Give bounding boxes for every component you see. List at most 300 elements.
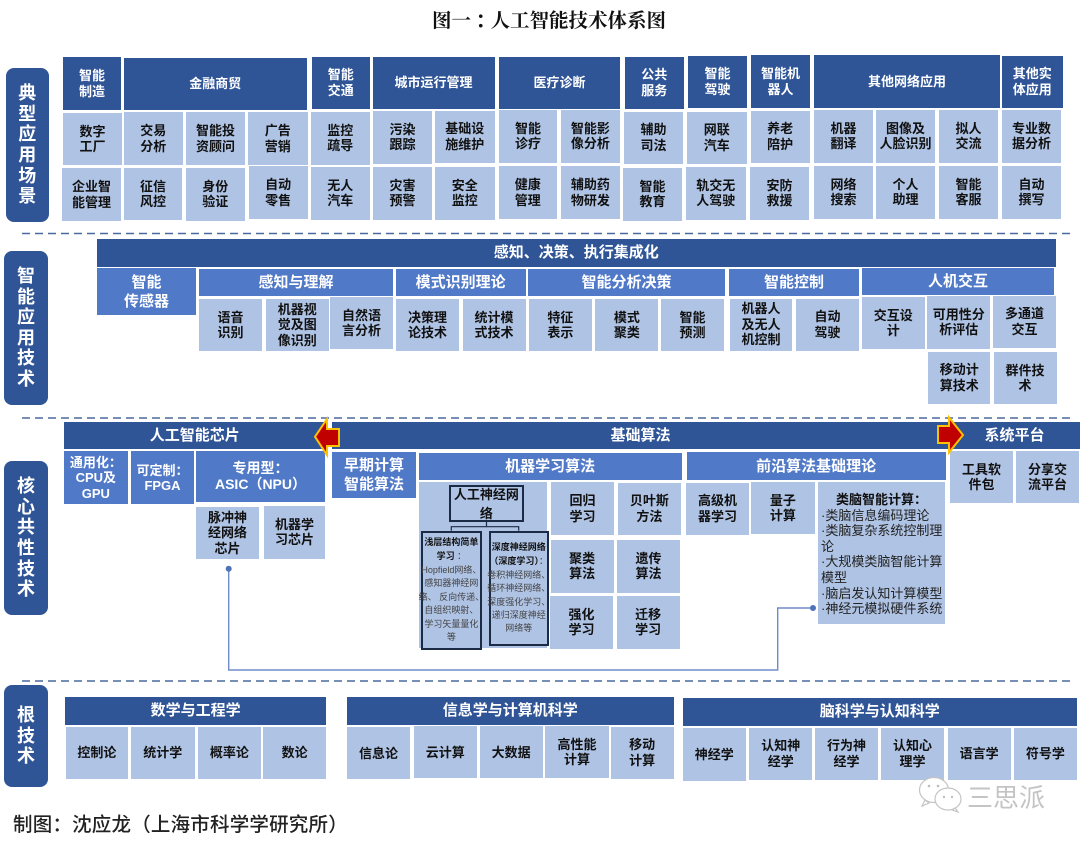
cell: statistical patterns [462,299,526,351]
cell: intelligent prediction [661,299,724,351]
cell: feature representation: 表示 [547,325,573,340]
cell: disaster warning [373,167,432,220]
cell: autonomous driving [796,299,859,351]
title: 图一 人工智能技术体系图 [432,5,666,33]
cell: cognitive psychology: 认知心 [893,738,932,753]
section label: typical application scenarios: 景 [18,186,36,206]
cell: professional data analysis [1002,110,1061,162]
cell: automated writing: 撰写 [1018,192,1044,207]
cell: advanced machine learning: 高级机 [698,493,737,508]
cell: linguistics [948,728,1011,780]
header: information and computer science [347,697,674,725]
cell: elderly care: 陪护 [767,137,793,152]
cell: multichannel interaction [993,296,1056,348]
subheader: general purpose chips: GPU [82,486,110,501]
cell: advertising [248,112,308,165]
cell: spiking neural network chips [196,507,259,559]
cell: machine learning chips: 机器学 [275,517,314,532]
box: deep learning: （深度学习）： [489,554,548,567]
header: smart transport [312,57,370,109]
section label: intelligent application technologies: 用 [17,328,35,348]
cell: probability theory: 概率论 [210,745,249,760]
cell: transfer learning [617,596,680,648]
cell: semiotics: 符号学 [1026,746,1065,761]
cell: credit risk control [124,168,182,220]
cell: judicial assistance: 辅助 [640,122,666,137]
cell: behavioral neuroscience [815,728,878,780]
cell: high performance computing: 高性能 [557,737,596,752]
cell: toolkits: 件包 [968,477,994,492]
cell: usability analysis: 析评估 [939,322,978,337]
header: system platforms [949,422,1080,449]
cell: statistical patterns: 统计模 [474,310,514,324]
box: deep learning: 循环神经网络、 [487,583,550,593]
cell: mobile computing: 移动计 [940,362,979,377]
panel: typical application scenarios [6,55,1063,222]
header: other physical applications: 体应用 [1013,82,1052,97]
cell: web search [814,166,873,218]
cell: groupware: 术 [1018,378,1032,393]
cell: brain-inspired computing [818,482,945,624]
header: other physical applications [1002,56,1062,108]
subheader: FPGA: FPGA [144,478,181,493]
cell: enterprise management: 企业智 [72,179,111,194]
cell: mobile computing: 移动 [629,737,655,752]
section label: core common technologies: 核 [17,476,35,496]
header: smart robots: 器人 [767,82,794,96]
cell: traffic monitoring: 疏导 [327,138,353,153]
cell: robot and UAV control: 机器人 [742,301,781,316]
cell: brain-inspired computing: ·脑启发认知计算模型 [821,586,942,601]
cell: robot and UAV control: 机控制 [742,332,781,347]
cell: advertising: 营销 [265,138,291,154]
cell: machine translation: 机器 [830,121,856,136]
cell: smart diagnosis: 诊疗 [515,136,541,151]
box: shallow learning: Hopfield网络、 [421,565,481,575]
cell: traffic monitoring [311,112,370,164]
cell: advanced machine learning [686,483,749,535]
cell: semiotics [1014,728,1077,780]
cell: automated writing: 自动 [1018,177,1044,192]
subheader: pattern recognition theory: 模式识别理论 [416,274,506,291]
header: smart robots [751,55,810,108]
cell: imaging analysis [561,110,620,162]
box: artificial neural network [449,485,524,522]
cell: robot and UAV control [730,299,792,351]
cell: drug development: 物研发 [571,192,610,208]
cell: reinforcement learning [550,596,613,648]
cell: advanced machine learning: 器学习 [698,509,737,524]
section label: intelligent application technologies: 智 [17,266,35,286]
cell: usability analysis: 可用性分 [933,307,985,322]
cell: interaction design: 计 [887,323,900,338]
box: shallow learning: 络、 反向传递、 [419,592,484,602]
cell: toolkits [950,451,1013,503]
cell: advertising: 广告 [265,123,291,138]
cell: image and face recognition [876,110,935,162]
header: smart driving: 智能 [704,66,730,81]
header: smart driving [688,56,747,108]
header: mathematics and engineering: 数学与工程学 [151,702,241,719]
cell: brain-inspired computing: 模型 [821,570,847,585]
section label: intelligent application technologies: 应 [17,307,35,327]
cell: number theory [263,727,326,779]
section label: intelligent application technologies [4,251,48,405]
box: shallow learning: 感知器神经网 [424,578,478,588]
cell: humanlike communication: 拟人 [955,121,982,136]
cell: number theory: 数论 [282,745,308,760]
cell: behavioral neuroscience: 经学 [833,754,860,769]
cell: neuroscience [683,728,746,781]
section label: core common technologies: 共 [17,517,35,537]
cell: enterprise management [62,168,121,221]
cell: cognitive neuroscience: 经学 [768,754,794,769]
cell: image and face recognition: 图像及 [886,121,925,136]
cell: digital factory [63,113,122,165]
subheader: ASIC [196,451,325,502]
cell: security rescue: 安防 [766,178,792,193]
subheader: general purpose chips [64,451,128,504]
cell: regression learning: 学习 [569,508,596,524]
cell: machine vision [266,299,329,351]
header: mathematics and engineering [65,697,326,725]
cell: professional data analysis: 专业数 [1012,121,1051,136]
subheader: smart sensors: 传感器 [124,292,169,310]
cell: drug development: 辅助药 [571,177,610,192]
cell: big data: 大数据 [492,745,531,760]
header: medical diagnosis: 医疗诊断 [533,75,586,90]
section label: typical application scenarios: 用 [18,145,36,165]
cell: security monitoring [435,167,494,220]
subheader: intelligent control [729,269,859,296]
cell: automated retail: 自动 [265,177,291,192]
cell: natural language analysis: 言分析 [342,323,381,338]
cell: feature representation [529,299,592,351]
cell: machine vision: 觉及图 [278,317,317,332]
subheader: general purpose chips: CPU及 [76,470,116,485]
cell: smart education: 智能 [639,179,666,194]
cell: elderly care [751,111,810,163]
header: brain and cognitive science [683,698,1077,726]
subheader: early computational intelligence: 早期计算 [344,457,404,474]
cell: trade analysis [124,112,182,165]
cell: information theory [347,727,410,779]
subheader: intelligent control: 智能控制 [764,274,824,291]
box: shallow learning [421,531,482,650]
box: artificial neural network: 络 [480,506,493,520]
cell: web search: 网络 [830,177,856,192]
cell: quantum computing [751,482,815,534]
cell: clustering algorithms: 算法 [569,566,595,581]
panel: artificial neural network background [419,482,547,648]
cell: bayesian methods: 贝叶斯 [630,493,669,508]
cell: driverless cars: 无人 [327,178,353,193]
subheader: smart sensors: 智能 [131,274,162,290]
cell: cognitive neuroscience [749,728,812,780]
section label: core common technologies: 术 [17,579,35,599]
header: city operations [372,57,494,109]
header: system platforms: 系统平台 [984,426,1044,444]
cell: credit risk control: 征信 [140,178,166,194]
cell: sharing platforms: 分享交 [1028,462,1067,476]
header: other network applications: 其他网络应用 [868,74,946,88]
cell: cognitive psychology [881,728,944,780]
cell: brain-inspired computing: 论 [821,539,834,554]
cell: multichannel interaction: 多通道 [1005,306,1044,321]
section label: typical application scenarios: 型 [18,104,36,124]
cell: feature representation: 特征 [547,310,573,324]
header: perception decision execution integration: 感知、决策、执行集成化 [494,244,659,261]
cell: spiking neural network chips: 经网络 [208,525,247,540]
cell: robo-advisor: 智能投 [196,123,235,138]
cell: control theory [66,727,128,779]
header: public services: 公共 [641,67,667,82]
cell: smart customer service: 客服 [955,192,982,207]
subheader: intelligent analysis and decisions [528,269,725,296]
box: deep learning: 递归深度神经 [492,610,546,620]
cell: smart diagnosis: 智能 [515,121,541,136]
cell: usability analysis [927,296,990,348]
header: city operations: 城市运行管理 [394,75,472,90]
cell: connected cars [687,112,746,164]
cell: machine vision: 像识别 [278,333,317,348]
connector: chips to brain-inspired computing [226,566,816,671]
box: shallow learning: 学习 ： [437,549,466,562]
cell: health management: 管理 [515,192,541,208]
cell: brain-inspired computing: 类脑智能计算： [836,489,927,508]
cell: brain-inspired computing: ·大规模类脑智能计算 [821,554,942,569]
cell: statistics: 统计学 [143,745,182,760]
cell: machine translation: 翻译 [830,136,856,151]
section label: root technologies [4,685,48,787]
cell: groupware: 群件技 [1005,363,1044,378]
cell: control theory: 控制论 [77,745,116,760]
cell: identity verification [186,168,244,220]
cell: bayesian methods: 方法 [636,509,662,524]
header: smart driving: 驾驶 [704,82,730,97]
subheader: general purpose chips: 通用化： [70,452,122,471]
header: smart manufacturing [63,57,121,110]
subheader: early computational intelligence: 智能算法 [344,476,404,493]
cell: cloud computing [414,726,477,778]
header: other physical applications: 其他实 [1013,66,1052,81]
cell: image and face recognition: 人脸识别 [879,136,932,151]
cell: transfer learning: 迁移 [635,607,661,622]
cell: driverless cars: 汽车 [327,193,353,208]
box: shallow learning: 浅层结构简单 [424,537,478,547]
header: smart transport: 智能 [328,67,354,82]
cell: regression learning: 回归 [569,493,596,508]
subheader: FPGA [131,451,194,504]
cell: rail driverless: 轨交无 [696,178,735,193]
cell: big data [480,726,543,778]
box: deep learning: 深度神经网络 [492,542,546,552]
cell: pattern clustering: 聚类 [614,325,640,340]
cell: pattern clustering [595,299,658,351]
cell: personal assistant [876,166,935,218]
cell: drug development [561,166,620,219]
cell: trade analysis: 分析 [140,138,166,154]
cell: health management [498,166,557,219]
header: medical diagnosis [499,57,620,109]
cell: automated retail: 零售 [265,192,291,208]
header: finance and commerce: 金融商贸 [189,76,241,91]
cell: infrastructure maintenance: 基础设 [445,121,484,136]
subheader: intelligent analysis and decisions: 智能分析决策 [581,274,672,291]
cell: decision theory: 论技术 [408,325,447,340]
section label: typical application scenarios: 应 [18,124,36,144]
subheader: early computational intelligence [332,452,416,498]
cell: humanlike communication [939,110,998,162]
cell: security rescue [750,167,809,220]
cell: disaster warning: 灾害 [389,178,416,193]
box: deep learning [489,531,549,646]
cell: infrastructure maintenance: 施维护 [445,137,484,152]
cell: robo-advisor [186,112,245,165]
cell: pollution tracking [373,110,432,164]
cell: machine learning chips [264,506,325,558]
title: ： [471,4,490,34]
subheader: perception and understanding: 感知与理解 [258,274,334,291]
cell: neuroscience: 神经学 [695,747,734,762]
cell: natural language analysis: 自然语 [342,308,381,322]
cell: web search: 搜索 [830,192,856,207]
cell: smart education [623,168,682,220]
subheader: frontier algorithm theory [687,452,946,480]
box: deep learning: 网络等 [505,623,532,633]
cell: genetic algorithms: 遗传 [635,551,662,566]
panel: core common technologies [4,414,1080,671]
cell: trade analysis: 交易 [140,123,166,138]
header: basic algorithms [332,422,949,449]
cell: identity verification: 验证 [202,194,228,209]
cell: linguistics: 语言学 [960,746,999,761]
cell: smart education: 教育 [639,194,666,209]
cell: quantum computing: 量子 [770,492,796,508]
cell: reinforcement learning: 强化 [568,607,594,622]
cell: interaction design: 交互设 [874,308,913,322]
cell: elderly care: 养老 [767,121,793,136]
section label: root technologies: 技 [17,726,35,746]
section label: intelligent application technologies: 术 [17,369,35,389]
subheader: human-computer interaction: 人机交互 [928,273,988,290]
cell: transfer learning: 学习 [635,622,661,637]
panel: intelligent application technologies [4,239,1057,405]
cell: automated writing [1002,166,1061,218]
cell: disaster warning: 预警 [389,193,416,208]
cell: security monitoring: 安全 [452,178,478,193]
cell: smart diagnosis [499,110,557,162]
cell: behavioral neuroscience: 行为神 [827,738,866,753]
cell: natural language analysis [330,297,393,349]
cell: statistics [131,727,195,779]
cell: security rescue: 救援 [766,193,792,208]
section label: core common technologies: 性 [17,538,35,558]
cell: quantum computing: 计算 [770,508,796,523]
cell: machine translation [814,110,873,162]
subheader: pattern recognition theory [396,269,526,296]
box: shallow learning: 自组织映射、 [424,605,478,615]
cell: speech recognition: 语音 [217,310,244,324]
cell: mobile computing: 算技术 [940,378,979,393]
cell: professional data analysis: 据分析 [1012,136,1051,151]
cell: multichannel interaction: 交互 [1011,322,1038,337]
section label: intelligent application technologies: 能 [17,286,35,306]
header: AI chips: 人工智能芯片 [150,427,240,444]
cell: robo-advisor: 资顾问 [196,138,235,154]
cell: infrastructure maintenance [435,110,494,163]
cell: intelligent prediction: 智能 [679,310,706,324]
cell: machine learning chips: 习芯片 [275,532,314,547]
cell: probability theory [198,727,261,779]
section label: root technologies: 根 [17,705,35,725]
header: brain and cognitive science: 脑科学与认知科学 [820,703,940,720]
header: AI chips [64,422,325,449]
cell: brain-inspired computing: ·神经元模拟硬件系统 [821,601,942,616]
cell: groupware [994,352,1056,404]
cell: mobile computing: 计算 [629,753,655,768]
cell: clustering algorithms: 聚类 [569,551,595,566]
cell: brain-inspired computing: ·类脑复杂系统控制理 [821,523,942,538]
cell: pollution tracking: 污染 [389,122,416,136]
cell: toolkits: 工具软 [962,462,1001,476]
cell: cloud computing: 云计算 [426,745,465,760]
cell: bayesian methods [618,483,681,535]
cell: smart customer service: 智能 [955,177,982,192]
cell: information theory: 信息论 [359,746,398,761]
cell: genetic algorithms [617,540,680,593]
header: information and computer science: 信息学与计算机科学 [443,702,578,719]
cell: imaging analysis: 像分析 [571,136,610,151]
cell: robot and UAV control: 及无人 [742,317,781,332]
cell: clustering algorithms [551,540,614,593]
cell: traffic monitoring: 监控 [327,122,353,138]
cell: humanlike communication: 交流 [955,136,982,151]
cell: judicial assistance: 司法 [640,138,666,153]
section label: root technologies: 术 [17,746,35,766]
cell: decision theory: 决策理 [408,310,447,324]
cell: rail driverless [686,167,746,220]
box: shallow learning: 等 [447,632,456,642]
cell: sharing platforms [1016,451,1079,503]
cell: driverless cars [311,167,370,220]
section label: core common technologies [4,461,48,615]
cell: judicial assistance [624,112,683,164]
cell: decision theory [396,299,459,351]
arrow: right red arrow [937,414,964,456]
subheader: machine learning algorithms [419,453,682,480]
cell: cognitive neuroscience: 认知神 [761,738,800,753]
cell: spiking neural network chips: 芯片 [214,541,240,556]
cell: statistical patterns: 式技术 [474,325,514,340]
cell: digital factory: 工厂 [79,139,106,154]
cell: autonomous driving: 自动 [814,309,840,324]
subheader: perception and understanding [199,269,393,296]
box: deep learning: 深度强化学习、 [487,597,550,607]
cell: imaging analysis: 智能影 [571,121,610,136]
box: deep learning: 卷积神经网络、 [487,570,550,580]
header: smart manufacturing: 智能 [79,68,105,82]
cell: high performance computing: 计算 [564,752,590,767]
cell: pollution tracking: 跟踪 [389,137,416,152]
cell: regression learning [551,482,614,535]
cell: digital factory: 数字 [79,124,106,138]
section label: intelligent application technologies: 技 [17,348,35,368]
section label: typical application scenarios: 场 [18,166,36,186]
cell: automated retail [249,166,308,219]
cell: mobile computing [928,352,990,404]
cell: speech recognition: 识别 [217,325,244,340]
